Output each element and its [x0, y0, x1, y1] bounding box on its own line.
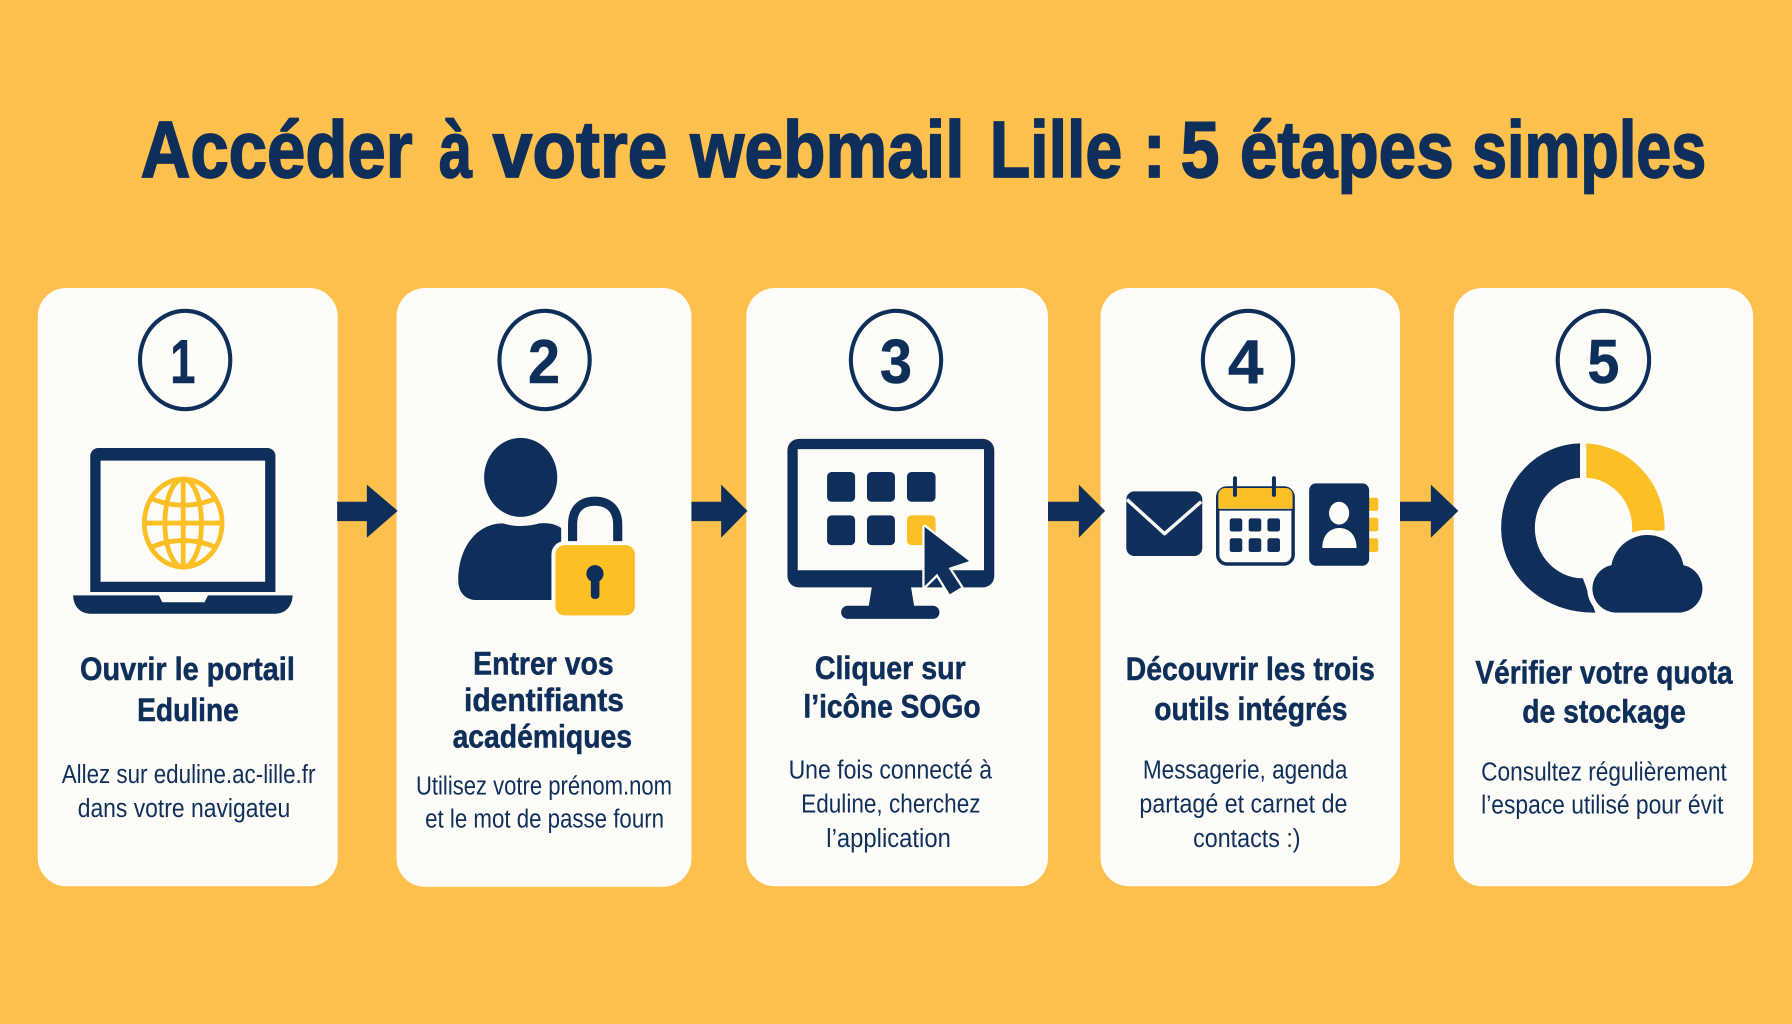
- title: [141, 105, 1706, 194]
- icon: envelope: [1126, 491, 1202, 556]
- step 2 description: et le mot de passe fourn: [425, 805, 664, 833]
- step number 3: [851, 311, 941, 409]
- step 3 heading: [803, 650, 981, 725]
- arrow: step 1 to 2: [337, 485, 398, 538]
- step number 1: [140, 311, 230, 409]
- step 1 heading: Eduline: [137, 692, 239, 728]
- step number 5: [1558, 311, 1649, 409]
- icon: laptop with globe: [73, 448, 293, 614]
- step 1 description: Allez sur eduline.ac-lille.fr: [62, 761, 316, 789]
- step 5 description: l’espace utilisé pour évit: [1481, 792, 1723, 820]
- title: 5: [1181, 105, 1219, 194]
- step 5 description: Consultez régulièrement: [1481, 759, 1727, 787]
- panel: step 4: [1101, 288, 1400, 886]
- step 1 description: [62, 761, 316, 823]
- step number 3: 3: [880, 328, 912, 397]
- title: à: [439, 105, 472, 194]
- step number 4: [1203, 311, 1293, 409]
- panel: step 3: [746, 288, 1048, 886]
- step 3 description: l’application: [826, 825, 951, 853]
- step 3 heading: l’icône SOGo: [803, 689, 981, 725]
- step 5 description: [1481, 759, 1727, 820]
- title: étapes: [1240, 105, 1454, 194]
- step 4 heading: outils intégrés: [1154, 691, 1347, 727]
- step 4 description: Messagerie, agenda: [1143, 756, 1348, 784]
- step 3 description: Eduline, cherchez: [801, 791, 981, 819]
- step 3 description: [789, 756, 993, 853]
- icon: user with padlock: [458, 438, 635, 615]
- step 1 heading: Ouvrir le portail: [80, 651, 295, 687]
- arrow: step 2 to 3: [691, 485, 747, 538]
- step 5 heading: [1475, 654, 1733, 729]
- step 2 description: Utilisez votre prénom.nom: [416, 772, 672, 800]
- title: webmail: [689, 105, 965, 194]
- step 2 heading: Entrer vos: [473, 645, 614, 681]
- step number 4: 4: [1228, 328, 1263, 397]
- icon: calendar: [1218, 478, 1293, 564]
- panel: step 2: [397, 288, 691, 887]
- arrow: step 3 to 4: [1048, 485, 1105, 538]
- step 2 heading: académiques: [453, 718, 632, 754]
- title: votre: [493, 105, 667, 194]
- step 4 description: contacts :): [1193, 825, 1301, 853]
- step 1 heading: [80, 651, 295, 728]
- icon: storage donut with cloud: [1501, 443, 1702, 613]
- step 4 description: partagé et carnet de: [1139, 791, 1347, 819]
- panel: step 5: [1454, 288, 1753, 886]
- step number 2: [499, 311, 590, 409]
- step 2 description: [416, 772, 672, 833]
- arrow: step 4 to 5: [1400, 485, 1458, 538]
- step 5 heading: Vérifier votre quota: [1475, 654, 1733, 690]
- step number 2: 2: [528, 328, 560, 397]
- step 5 heading: de stockage: [1522, 693, 1686, 729]
- title: simples: [1472, 105, 1706, 194]
- icon: contact book: [1309, 483, 1378, 566]
- step 4 description: [1139, 756, 1348, 853]
- step 3 description: Une fois connecté à: [789, 756, 993, 784]
- title: :: [1143, 105, 1166, 194]
- icon: monitor with app grid and cursor: [787, 439, 994, 619]
- step 4 heading: [1126, 651, 1375, 727]
- title: Accéder: [141, 105, 413, 194]
- step number 1: 1: [170, 328, 195, 397]
- step 2 heading: identifiants: [464, 682, 624, 718]
- step 4 heading: Découvrir les trois: [1126, 651, 1375, 687]
- step 3 heading: Cliquer sur: [815, 650, 966, 686]
- panel: step 1: [38, 288, 338, 886]
- step 1 description: dans votre navigateu: [78, 795, 290, 823]
- step 2 heading: [453, 645, 632, 754]
- title: Lille: [990, 105, 1122, 194]
- step number 5: 5: [1587, 328, 1619, 397]
